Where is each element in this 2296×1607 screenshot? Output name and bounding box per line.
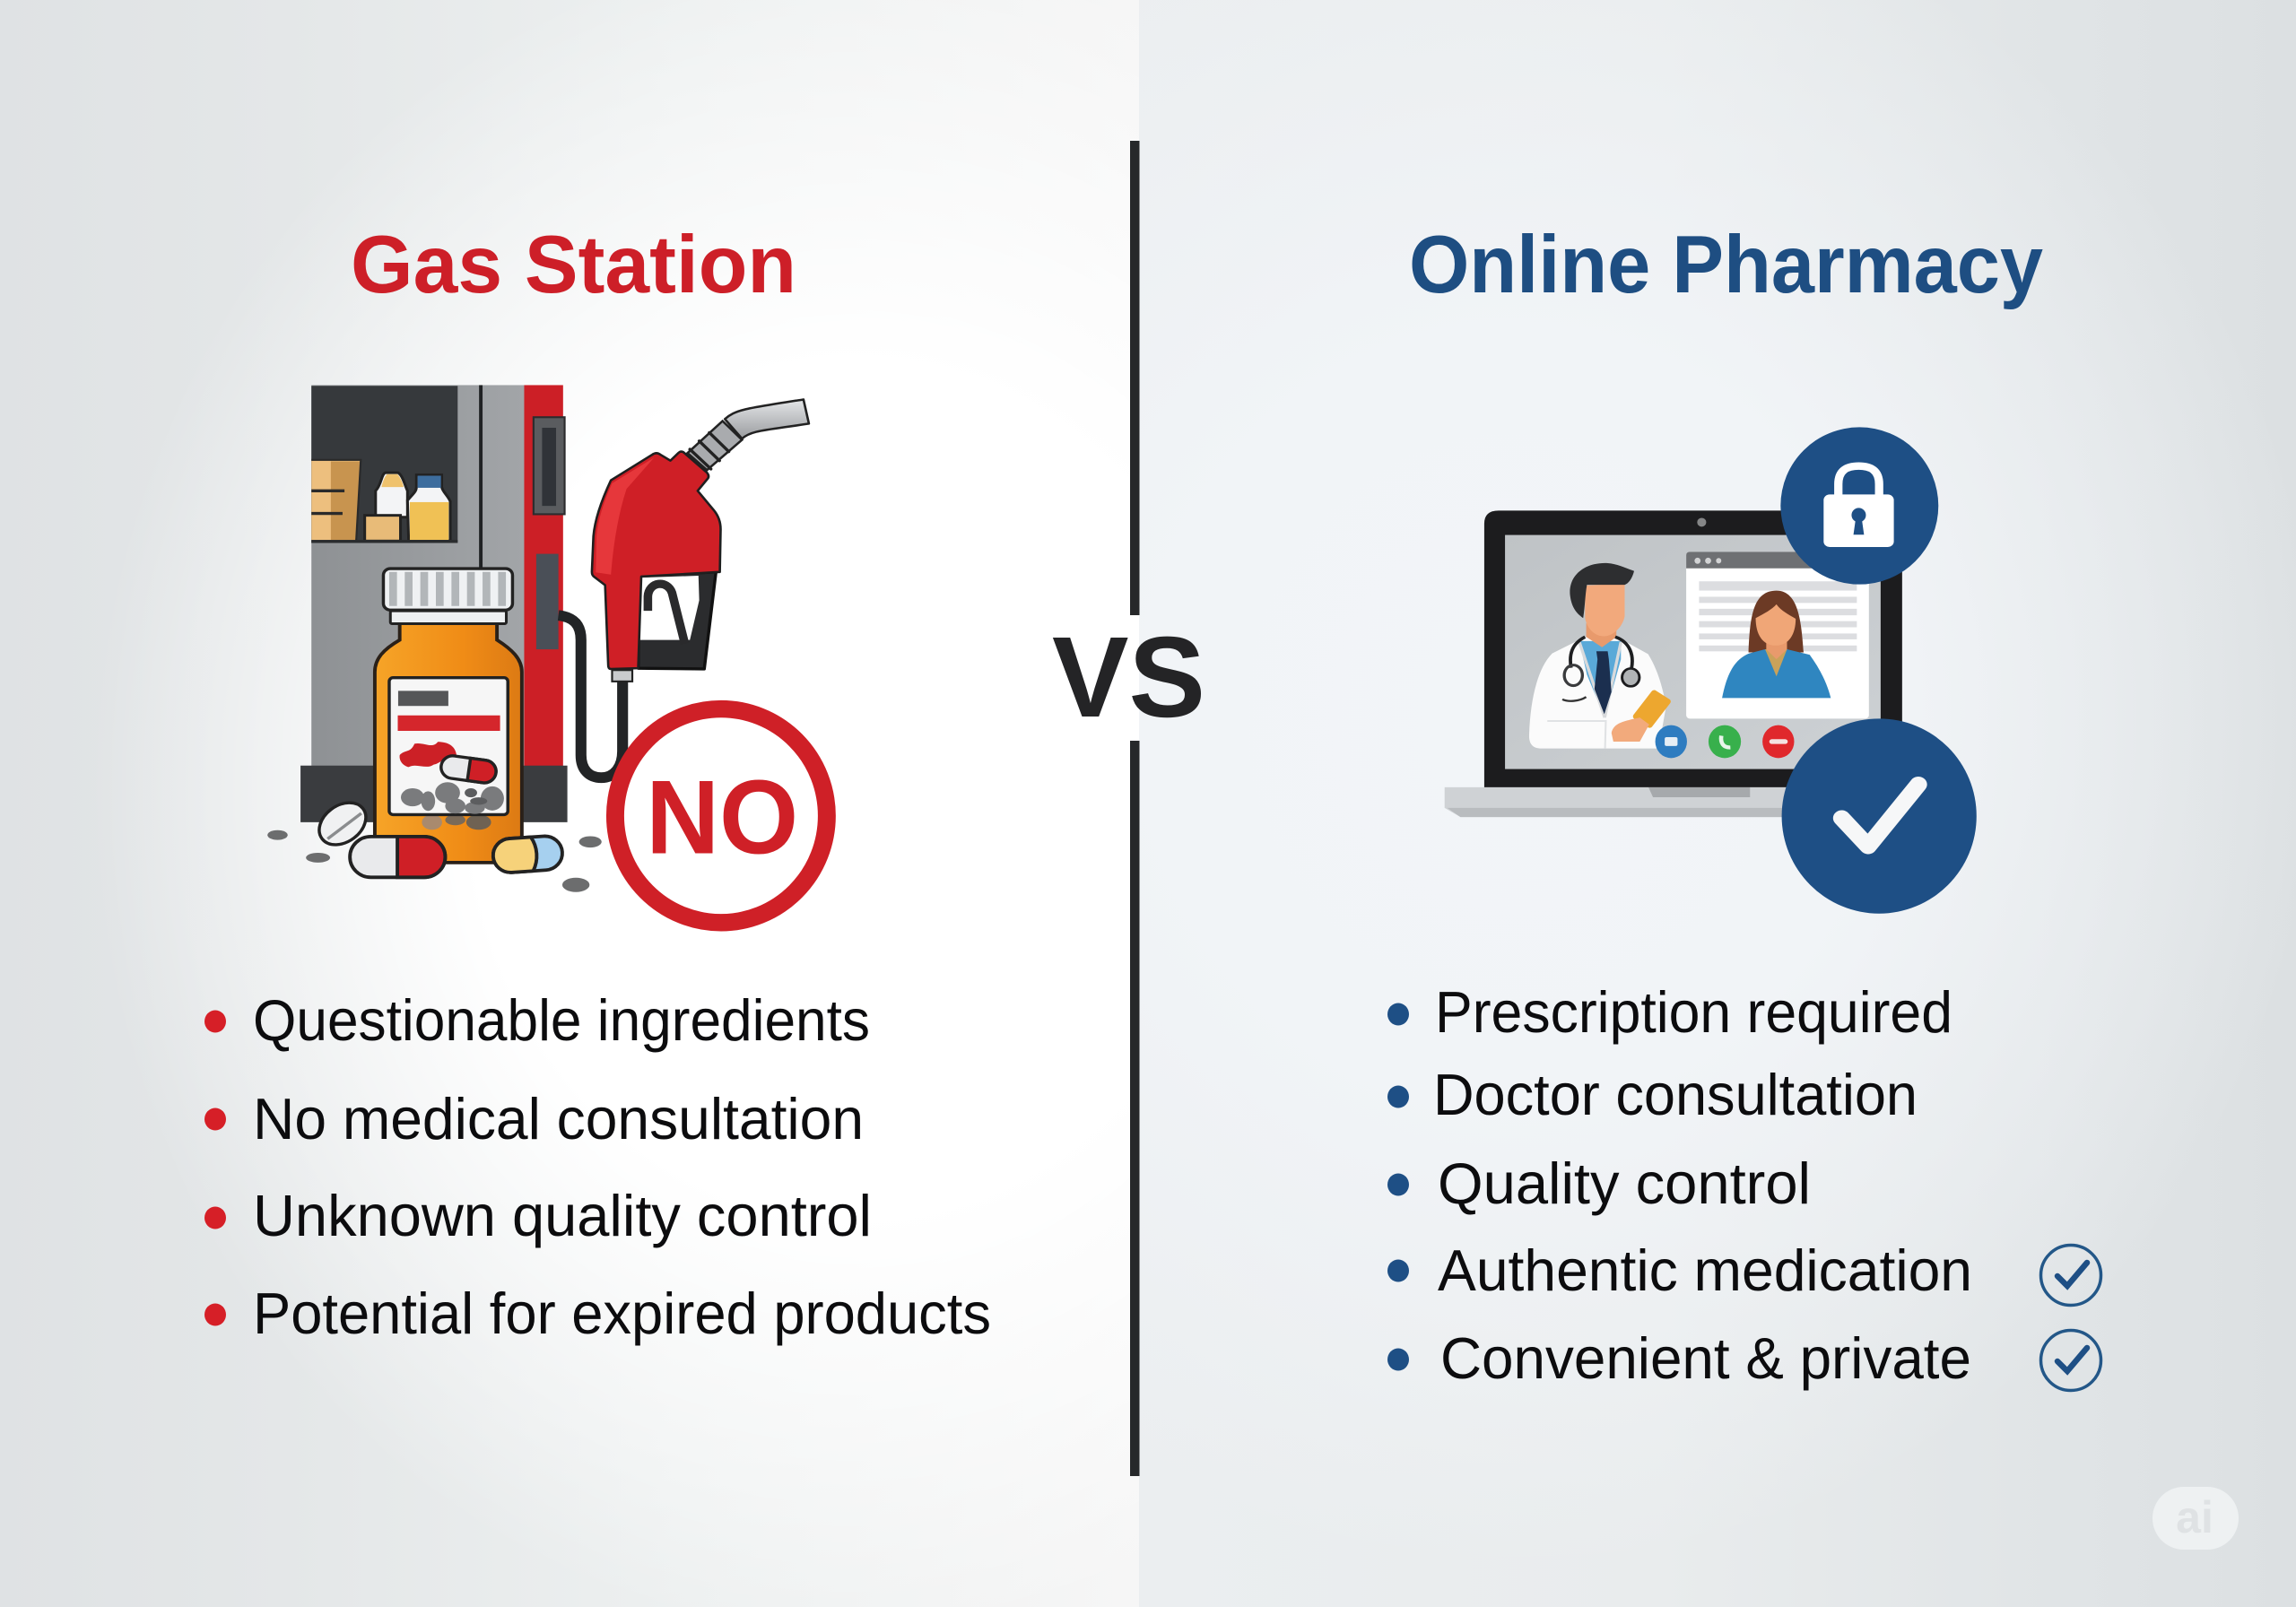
doctor figure [1529,563,1672,749]
pump display [534,417,565,514]
pill bottle [375,569,522,863]
capsule red and white [350,837,445,877]
nozzle body [592,452,720,669]
shop window shelf [311,386,457,543]
scattered specks [267,830,602,892]
bullet row 1: Questionable ingredients [253,987,870,1053]
call button: end [1762,725,1794,758]
screen [1505,535,1881,769]
watermark badge: ai [2176,1492,2213,1542]
tablet [311,795,374,854]
pump base [300,766,568,822]
spout [688,399,809,470]
laptop bezel [1484,510,1902,787]
divider line: lower [1130,741,1139,1476]
bullet row 3: Unknown quality control [253,1183,872,1248]
lock badge [1780,427,1938,585]
divider line: upper [1130,141,1139,615]
watermark badge [2152,1487,2239,1550]
bullet row 2: Doctor consultation [1433,1062,1918,1127]
hose holder [536,554,559,649]
handle opening [639,576,700,640]
capsule yellow and blue [492,835,563,873]
heading: Online Pharmacy: Online Pharmacy [1409,220,2043,310]
patient window [1686,552,1869,718]
bullet row 3: Quality control [1438,1151,1811,1216]
building wall [311,385,525,767]
laptop base [1445,787,1839,817]
call button: message [1656,725,1687,758]
wall seam [479,385,483,570]
bullet row 1: Prescription required [1435,979,1952,1045]
check badge [1782,718,1977,914]
list: online pharmacy benefits [1387,979,1972,1391]
VS label: VS [1052,613,1205,742]
bullet row 4: Potential for expired products [253,1281,991,1346]
red pump column [524,385,563,767]
nozzle handle [639,572,716,669]
NO badge [615,709,827,923]
patient figure [1722,591,1831,698]
list: gas station risks [204,987,991,1346]
icon: outlined check 2 [2041,1331,2100,1390]
illustration: gas station pump with pill bottle [267,385,827,923]
illustration: laptop video consultation [1445,427,1977,914]
fuel hose [559,615,622,777]
bullet row 5: Convenient & private [1440,1325,1971,1391]
hose connector [612,670,632,682]
heading: Gas Station: Gas Station [351,220,796,310]
bullet row 2: No medical consultation [253,1086,864,1151]
webcam [1697,517,1706,526]
nozzle highlight [596,457,654,575]
icon: outlined check 1 [2041,1245,2100,1306]
call button: phone [1709,725,1741,758]
trigger [648,584,685,644]
NO badge: NO [646,759,798,876]
bullet row 4: Authentic medication [1438,1238,1972,1303]
